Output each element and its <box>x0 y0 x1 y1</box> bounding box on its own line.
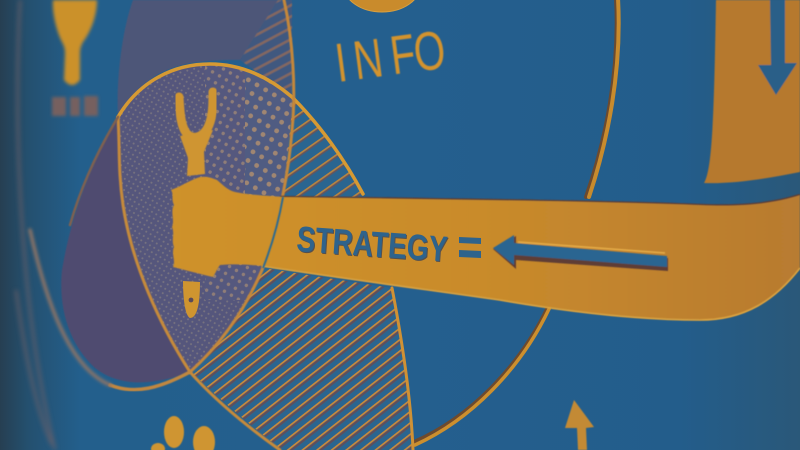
highlight on arm edge <box>262 266 800 320</box>
panel: upper purple circle region <box>118 0 292 117</box>
icon: small up arrow <box>565 400 594 450</box>
right box with arrow <box>704 0 800 183</box>
label: STRATEGY: STRATEGY <box>295 218 449 270</box>
panel: dotted intersection <box>119 66 292 370</box>
label: STRATEGY: STRATEGY <box>296 219 450 271</box>
band shadow <box>280 195 800 206</box>
panel: lower hatched region <box>191 268 412 450</box>
banner: arm and fist <box>171 177 800 320</box>
bottom dots icon <box>151 416 215 450</box>
equals sign <box>459 237 481 258</box>
panel: left purple circle region <box>61 117 190 382</box>
icon: light bulb <box>53 0 97 85</box>
panel: small hatch right of intersection <box>283 100 363 197</box>
icon: fork handle end <box>183 281 200 318</box>
heading: INFO: INFO <box>332 19 449 94</box>
bulb caption (illegible, out of focus) <box>52 96 98 116</box>
arrow pointing left <box>493 235 668 271</box>
circle outlines <box>30 0 413 450</box>
icon: down arrow <box>758 0 797 95</box>
wrist divider line <box>263 197 283 268</box>
icon: fork <box>179 92 213 176</box>
top circle shape <box>344 0 420 12</box>
big outer circle arcs <box>414 0 619 445</box>
hand holding fork <box>171 92 800 320</box>
faint left circle outlines <box>16 0 55 450</box>
panel: right box <box>704 0 800 183</box>
